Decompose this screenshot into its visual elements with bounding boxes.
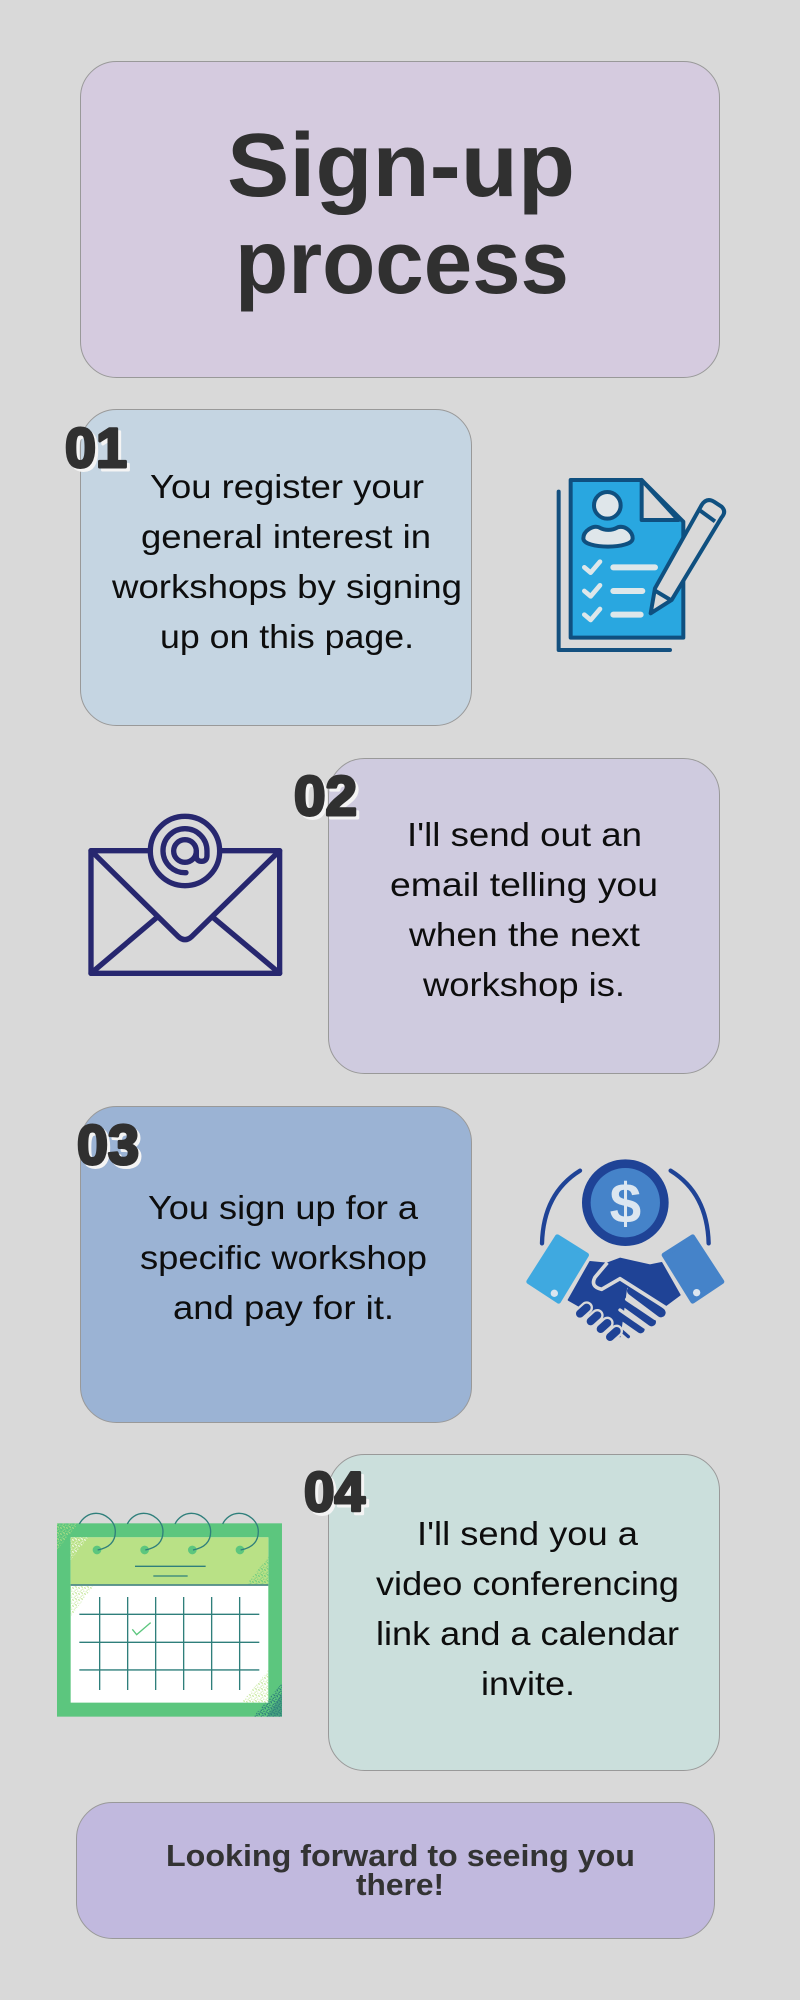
text: closing message: Looking forward to seeing you — [166, 1838, 635, 1873]
text: step 4 description: video conferencing — [376, 1565, 679, 1602]
heading: Sign-up process — [227, 116, 575, 313]
panel: title — [80, 62, 720, 378]
icon: spiral calendar — [57, 1513, 282, 1717]
number: 02: 02 — [294, 764, 357, 827]
panel: step 3 — [80, 1106, 472, 1422]
text: step 3 description: and pay for it. — [173, 1289, 394, 1326]
text: step 3 description: specific workshop — [140, 1239, 427, 1276]
panel: step 2 — [328, 758, 720, 1074]
heading: Sign-up process: Sign-up — [227, 116, 575, 216]
text: step 4 description: invite. — [481, 1665, 575, 1702]
heading: Sign-up process: process — [235, 213, 569, 313]
text: step 1 description: You register your — [150, 468, 424, 505]
text: step 1 description — [111, 468, 462, 655]
text: step 3 description — [140, 1189, 427, 1326]
text: step 2 description: when the next — [408, 916, 640, 953]
number: 04: 04 — [304, 1460, 365, 1523]
text: step 2 description: email telling you — [390, 866, 658, 903]
icon: registration form and pencil — [559, 480, 724, 650]
text: step 2 description: I'll send out an — [407, 816, 642, 853]
text: step 2 description: workshop is. — [422, 966, 625, 1003]
text: step 4 description: link and a calendar — [376, 1615, 679, 1652]
text: step 2 description — [390, 816, 658, 1003]
panel: closing message — [76, 1802, 714, 1938]
text: step 1 description: up on this page. — [160, 618, 414, 655]
icon: handshake with dollar coin — [529, 1159, 722, 1337]
text: step 3 description: You sign up for a — [148, 1189, 419, 1226]
text: step 4 description — [376, 1515, 679, 1702]
text: closing message — [166, 1838, 635, 1902]
number: 03: 03 — [77, 1113, 139, 1176]
number: 01: 01 — [65, 416, 127, 479]
panel: step 4 — [328, 1454, 720, 1770]
text: closing message: there! — [356, 1867, 444, 1902]
icon: envelope with at sign — [91, 816, 280, 973]
icon: handshake with dollar coin: $ — [610, 1173, 641, 1236]
text: step 1 description: general interest in — [141, 518, 431, 555]
text: step 4 description: I'll send you a — [417, 1515, 639, 1552]
panel: step 1 — [80, 410, 472, 726]
text: step 1 description: workshops by signing — [111, 568, 462, 605]
